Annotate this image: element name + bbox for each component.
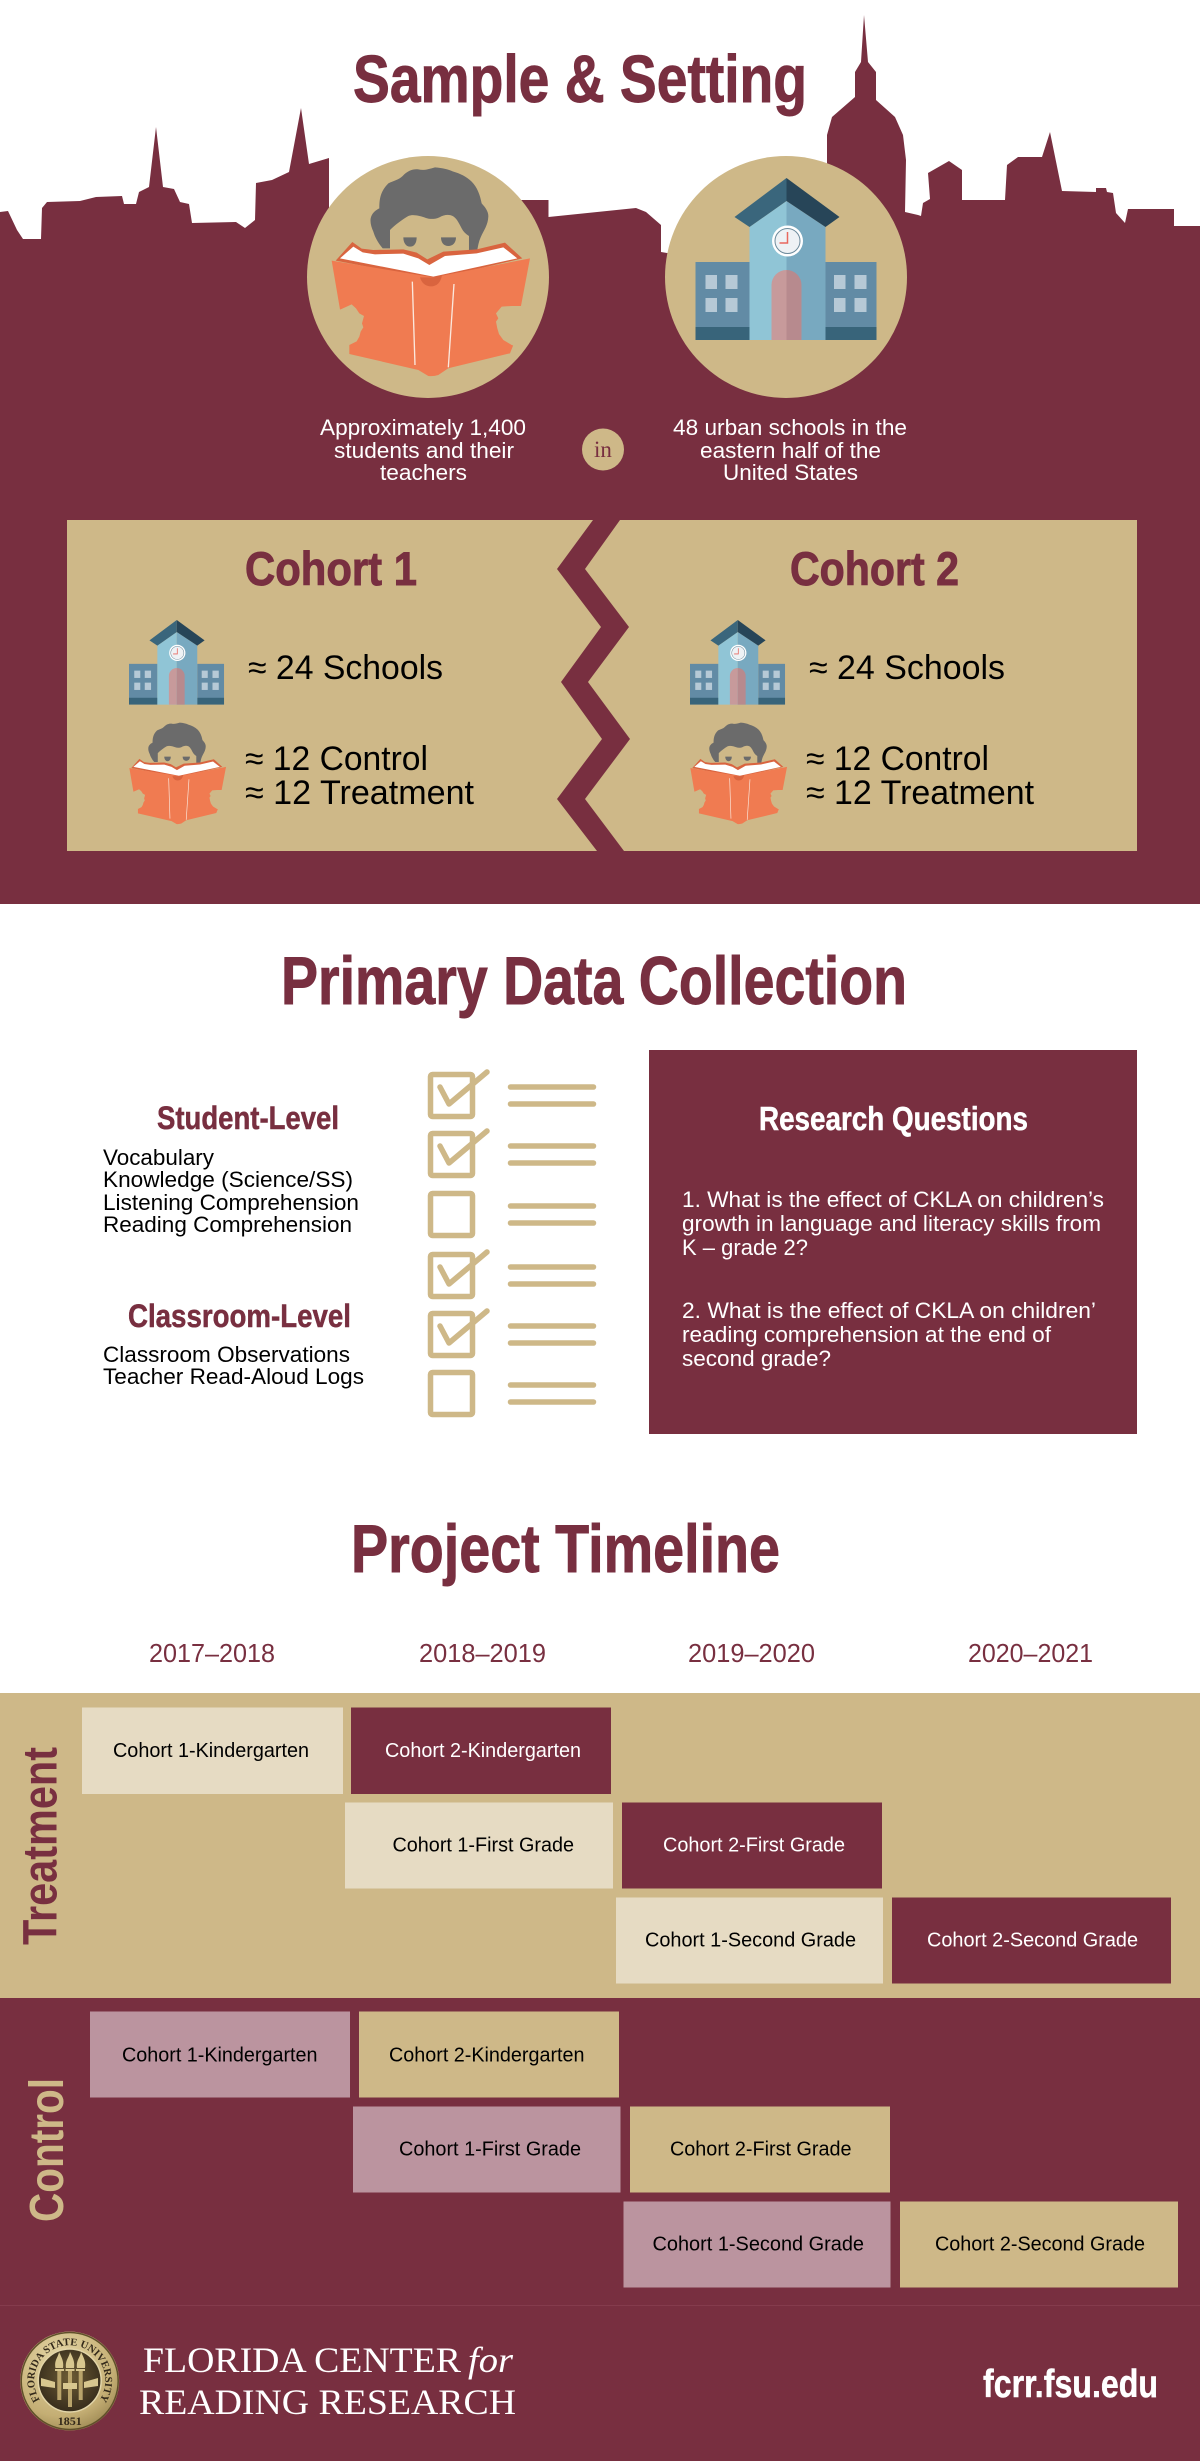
- cohort 1 bars: Cohort 1-Second Grade: [645, 1930, 856, 1952]
- cohort 2 control bars: Cohort 2-Kindergarten: [389, 2044, 584, 2066]
- panel: research questions: reading comprehension at the end of: [682, 1322, 1052, 1347]
- icon: school in gold circle: [665, 156, 907, 398]
- cohort 1 control bars: Cohort 1-Kindergarten: [122, 2044, 318, 2066]
- text block: classroom-level measures: [103, 1298, 364, 1389]
- badge: in: in: [594, 437, 612, 462]
- cohort 2 control bars: [359, 2012, 1178, 2288]
- text block: student-level measures: Vocabulary: [103, 1145, 214, 1170]
- website: fcrr.fsu.edu: fcrr.fsu.edu: [983, 2363, 1158, 2406]
- text: cohort 1 groups: [245, 740, 475, 812]
- cohort 2 control bars: Cohort 2-Second Grade: [935, 2234, 1145, 2256]
- text block: schools: [673, 415, 907, 485]
- city skyline silhouette and maroon section background: [0, 15, 1200, 904]
- timeline year labels: 2019–2020: [688, 1638, 815, 1668]
- cohort 2 bars: Cohort 2-First Grade: [663, 1834, 845, 1856]
- text block: classroom-level measures: Classroom-Level: [128, 1298, 351, 1334]
- cohort 2 control bars: Cohort 2-First Grade: [670, 2138, 852, 2160]
- timeline year labels: [149, 1638, 1093, 1668]
- label: Treatment: Treatment: [14, 1747, 68, 1945]
- title: Sample & Setting: Sample & Setting: [353, 42, 807, 117]
- icon: university seal: 1851: [58, 2414, 82, 2428]
- text: cohort 1 groups: ≈ 12 Treatment: [245, 774, 475, 812]
- icon: student reading in gold circle: [307, 156, 549, 398]
- panel: research questions: 1. What is the effect of CKLA on children’s: [682, 1187, 1104, 1212]
- text block: students: Approximately 1,400: [320, 415, 526, 440]
- heading: Primary Data Collection: Primary Data Collection: [281, 943, 907, 1019]
- text block: schools: United States: [723, 460, 858, 485]
- logo text: Florida Center for Reading Research: [139, 2340, 516, 2422]
- text block: students: [320, 415, 526, 485]
- icon: university seal: FLORIDA STATE UNIVERSITY: [27, 2338, 112, 2404]
- cohort 1 control bars: Cohort 1-Second Grade: [652, 2234, 864, 2256]
- text block: student-level measures: [103, 1100, 359, 1237]
- icon: checklist: [430, 1072, 594, 1414]
- timeline year labels: 2017–2018: [149, 1638, 275, 1668]
- timeline year labels: 2020–2021: [968, 1638, 1093, 1668]
- text block: student-level measures: Reading Comprehension: [103, 1212, 352, 1237]
- text: cohort 2 groups: [806, 740, 1035, 812]
- icon: school, cohort 2: [690, 620, 785, 705]
- text block: schools: 48 urban schools in the: [673, 415, 907, 440]
- text block: schools: eastern half of the: [700, 438, 881, 463]
- heading: Cohort 1: Cohort 1: [245, 542, 417, 595]
- panel: control timeline and footer background: [0, 1998, 1200, 2461]
- text block: students: teachers: [380, 460, 467, 485]
- text: cohort 1 groups: ≈ 12 Control: [245, 740, 428, 778]
- panel: treatment timeline: [0, 1693, 1200, 1998]
- icon: university seal: [20, 2332, 120, 2430]
- cohort 1 bars: Cohort 1-Kindergarten: [113, 1740, 309, 1762]
- text block: classroom-level measures: Classroom Observations: [103, 1342, 350, 1367]
- heading: Project Timeline: Project Timeline: [351, 1511, 780, 1587]
- cohort 1 bars: Cohort 1-First Grade: [392, 1834, 574, 1856]
- cohort 1 bars: [82, 1708, 883, 1984]
- text: cohort 2 groups: ≈ 12 Control: [806, 740, 989, 778]
- panel: research questions: Research Questions: [759, 1100, 1028, 1137]
- cohort 1 control bars: [90, 2012, 890, 2288]
- text block: students: students and their: [334, 438, 514, 463]
- panel: research questions: K – grade 2?: [682, 1235, 808, 1260]
- panel: cohorts: [67, 520, 1137, 851]
- icon: reader, cohort 1: [129, 723, 226, 824]
- text: cohort 2 schools: ≈ 24 Schools: [809, 649, 1005, 687]
- text block: classroom-level measures: Teacher Read-Aloud Logs: [103, 1364, 364, 1389]
- cohort 2 bars: [351, 1708, 1171, 1984]
- logo text: Florida Center for Reading Research: READING RESEARCH: [139, 2382, 516, 2422]
- timeline year labels: 2018–2019: [419, 1638, 546, 1668]
- text block: student-level measures: Listening Comprehension: [103, 1190, 359, 1215]
- logo text: Florida Center for Reading Research: for: [468, 2340, 514, 2380]
- text block: student-level measures: Student-Level: [157, 1100, 339, 1136]
- logo text: Florida Center for Reading Research: FLORIDA CENTER: [143, 2340, 461, 2380]
- panel: research questions: 2. What is the effect of CKLA on children’: [682, 1298, 1096, 1323]
- cohort 1 control bars: Cohort 1-First Grade: [399, 2138, 581, 2160]
- icon: reader, cohort 2: [690, 723, 787, 824]
- panel: research questions: [649, 1050, 1137, 1434]
- icon: school, cohort 1: [129, 620, 224, 705]
- heading: Cohort 2: Cohort 2: [790, 542, 959, 595]
- cohort 2 bars: Cohort 2-Kindergarten: [385, 1740, 581, 1762]
- text block: student-level measures: Knowledge (Science/SS): [103, 1167, 353, 1192]
- label: Control: Control: [21, 2078, 74, 2222]
- panel: research questions: growth in language and literacy skills from: [682, 1211, 1101, 1236]
- badge: in: [582, 428, 624, 470]
- panel: research questions: second grade?: [682, 1346, 831, 1371]
- cohort 2 bars: Cohort 2-Second Grade: [927, 1930, 1138, 1952]
- text: cohort 1 schools: ≈ 24 Schools: [248, 649, 443, 687]
- text: cohort 2 groups: ≈ 12 Treatment: [806, 774, 1035, 812]
